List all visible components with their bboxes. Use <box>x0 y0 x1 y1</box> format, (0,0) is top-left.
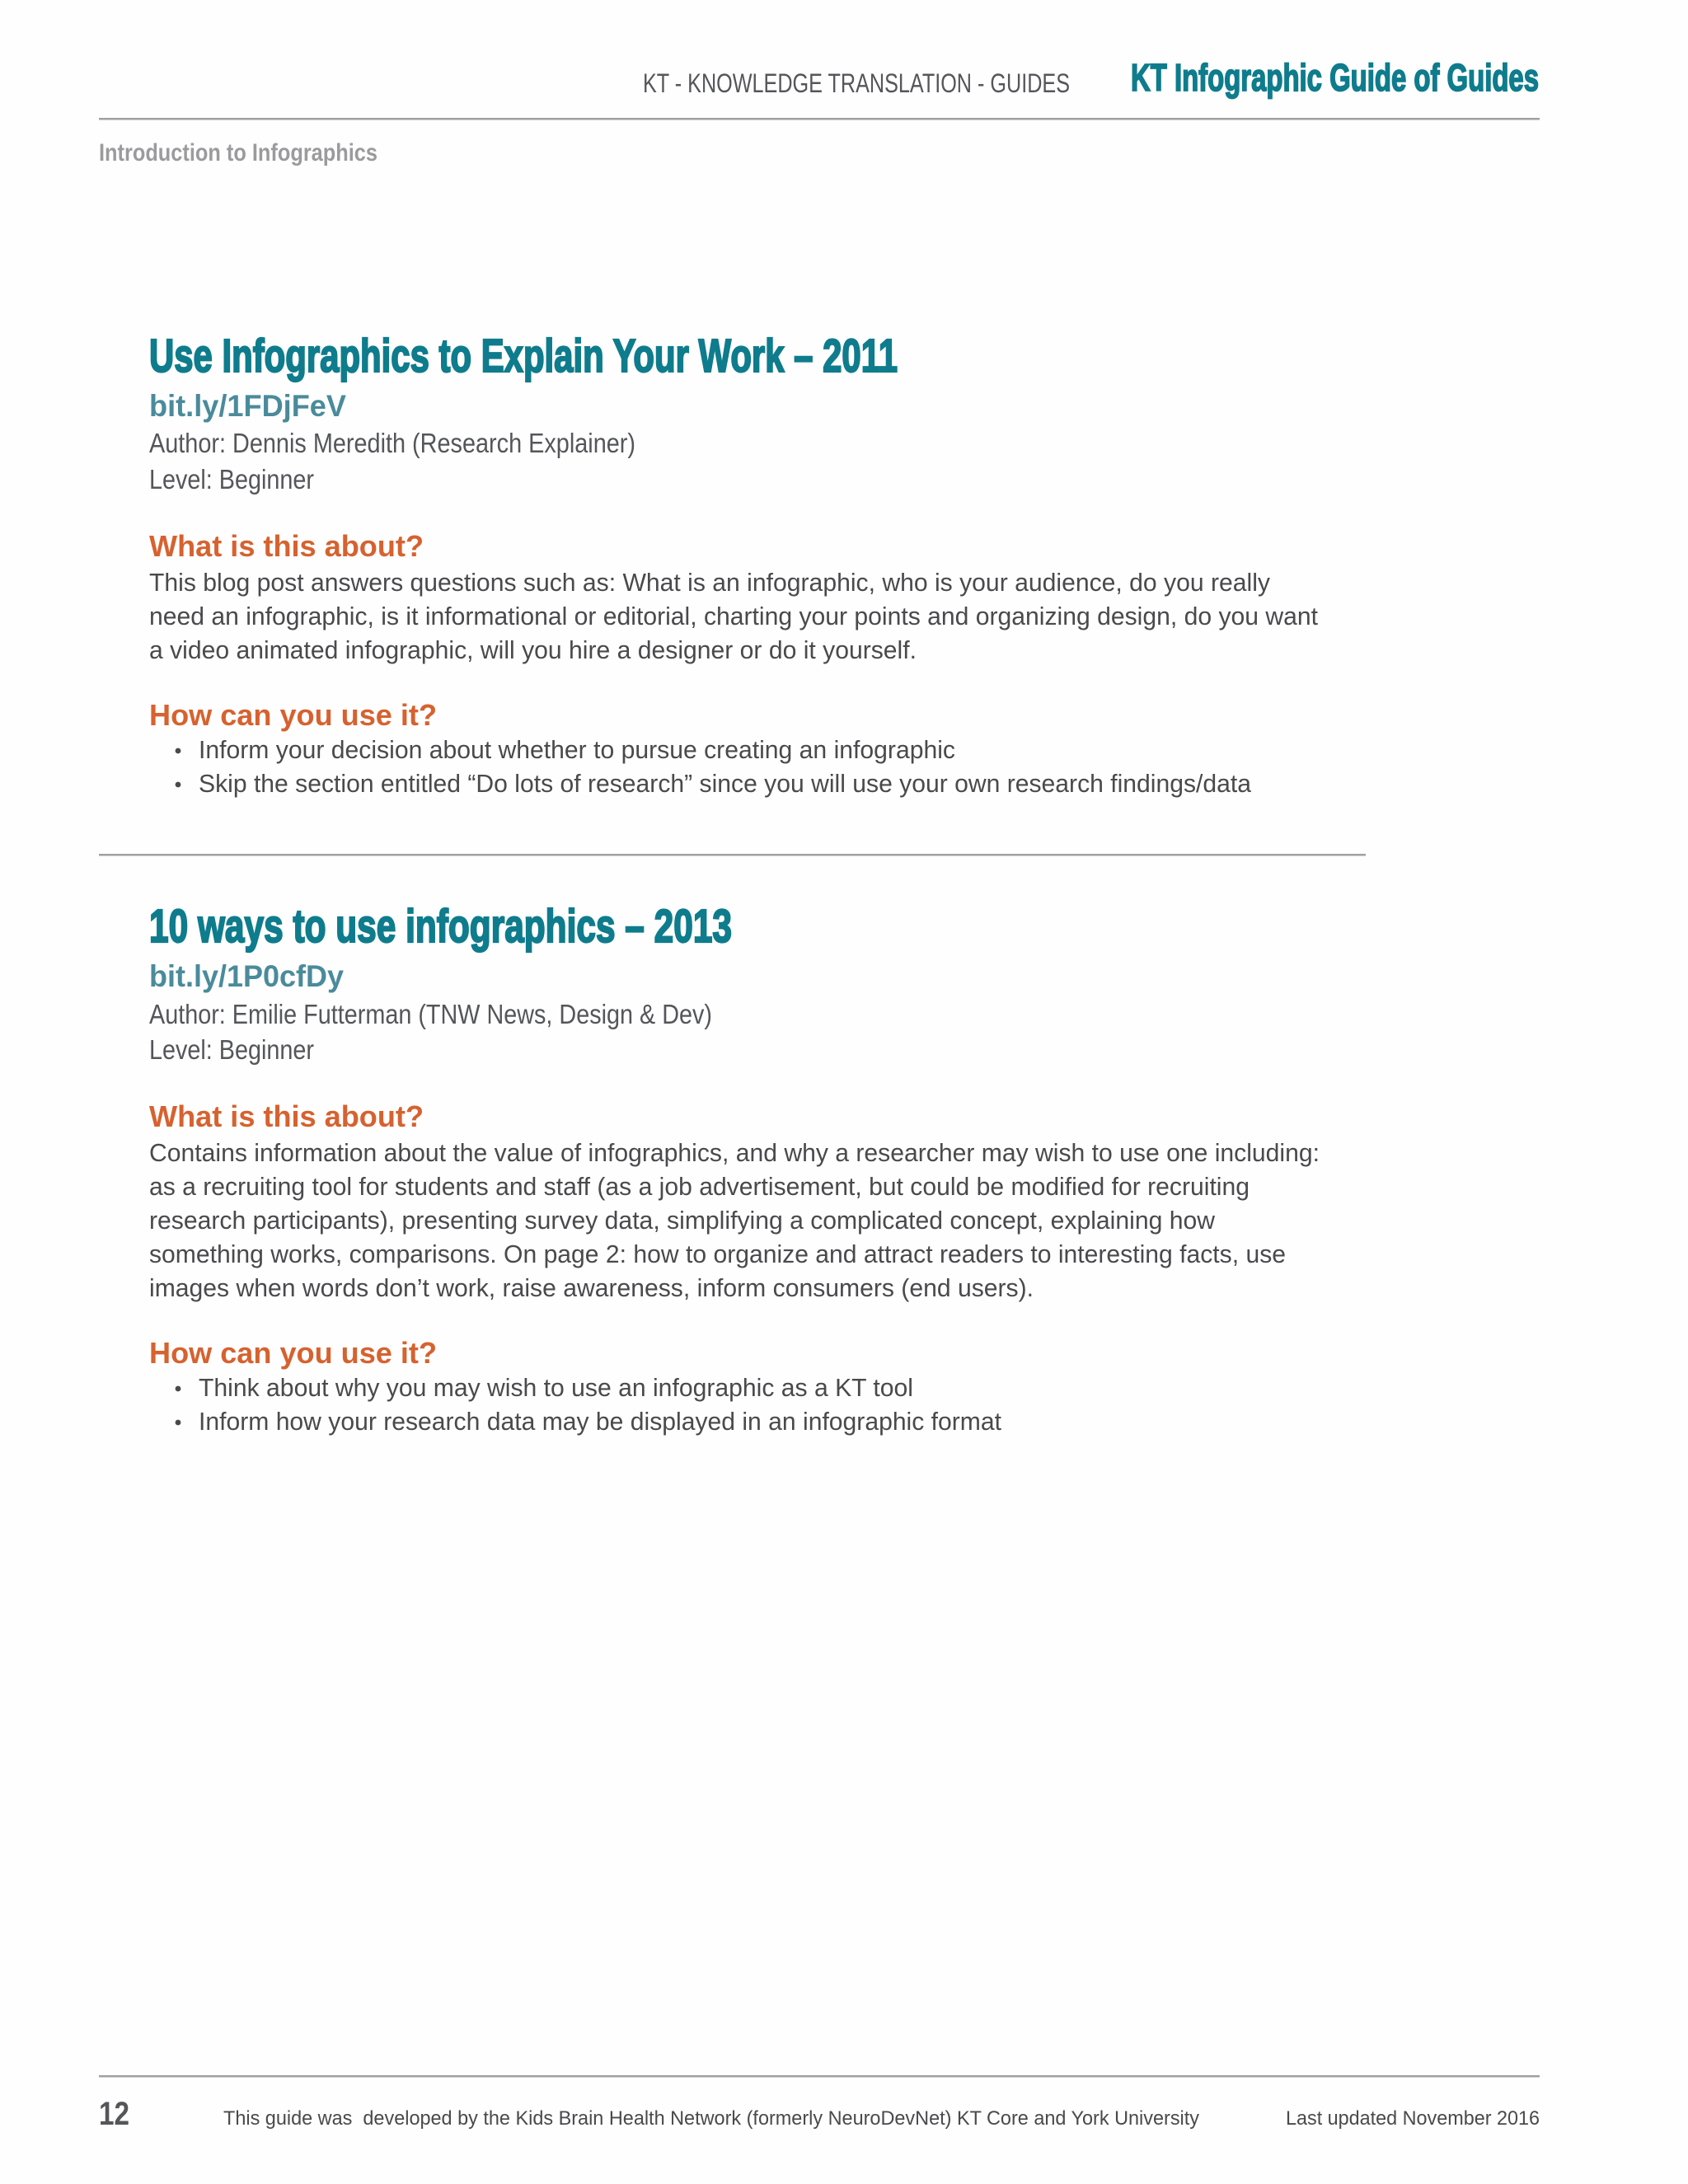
guide 2 what text: Contains information about the value of infographics, and why a researcher may wish to use one including: <box>149 1138 1320 1167</box>
guide 1 bullets <box>176 735 1252 798</box>
guide 2 what heading: What is this about? <box>149 1099 424 1133</box>
guide 1 how heading: How can you use it? <box>149 698 437 732</box>
guide 1 title: Use Infographics to Explain Your Work – 2011 <box>149 330 898 382</box>
guide 2 what text: research participants), presenting survey data, simplifying a complicated concept, explaining how <box>149 1206 1216 1235</box>
guide 1 what text: need an infographic, is it informational or editorial, charting your points and organizing design, do you want <box>149 602 1318 630</box>
header title: KT Infographic Guide of Guides <box>1131 56 1539 99</box>
footer credit: This guide was developed by the Kids Brain Health Network (formerly NeuroDevNet) KT Core and York University <box>223 2107 1199 2130</box>
guide 2 what text: as a recruiting tool for students and staff (as a job advertisement, but could be modified for recruiting <box>149 1172 1250 1201</box>
guide 1 author and level: Author: Dennis Meredith (Research Explainer) <box>149 428 635 458</box>
guide 1 bullets: Skip the section entitled “Do lots of research” since you will use your own research findings/data <box>199 769 1252 798</box>
guide 1 author and level: Level: Beginner <box>149 464 314 494</box>
guide 1 author and level <box>149 428 635 494</box>
guide 1 bullets: Inform your decision about whether to pursue creating an infographic <box>199 735 955 764</box>
guide 2 what text: images when words don’t work, raise awareness, inform consumers (end users). <box>149 1273 1034 1302</box>
guide 2 what text: something works, comparisons. On page 2: how to organize and attract readers to interesting facts, use <box>149 1240 1286 1268</box>
guide 2 how heading: How can you use it? <box>149 1336 437 1370</box>
guide 1 what text: a video animated infographic, will you hire a designer or do it yourself. <box>149 635 917 664</box>
guide 2 bullets: Inform how your research data may be displayed in an infographic format <box>199 1407 1001 1436</box>
section label: Introduction to Infographics <box>99 139 377 166</box>
guide 1 what heading: What is this about? <box>149 529 424 563</box>
page header <box>643 56 1539 99</box>
guide 2 author and level <box>149 999 712 1065</box>
page footer <box>99 2096 1540 2132</box>
page number: 12 <box>99 2096 129 2132</box>
guide 1 link: bit.ly/1FDjFeV <box>149 389 346 423</box>
guide 2 what text <box>149 1138 1320 1302</box>
guide 2 title: 10 ways to use infographics – 2013 <box>149 900 732 953</box>
guide 1 what text: This blog post answers questions such as: What is an infographic, who is your audience, do you really <box>149 568 1270 597</box>
guide 2 link: bit.ly/1P0cfDy <box>149 959 344 993</box>
header label: KT - KNOWLEDGE TRANSLATION - GUIDES <box>643 68 1070 98</box>
guide 2 author and level: Author: Emilie Futterman (TNW News, Design & Dev) <box>149 999 712 1029</box>
panel: guide 1 <box>149 330 1318 798</box>
guide 2 bullets <box>176 1373 1001 1436</box>
guide 2 bullets: Think about why you may wish to use an infographic as a KT tool <box>199 1373 913 1402</box>
guide 1 what text <box>149 568 1318 664</box>
panel: guide 2 <box>149 900 1320 1436</box>
guide 2 author and level: Level: Beginner <box>149 1034 314 1065</box>
footer date: Last updated November 2016 <box>1286 2107 1540 2130</box>
